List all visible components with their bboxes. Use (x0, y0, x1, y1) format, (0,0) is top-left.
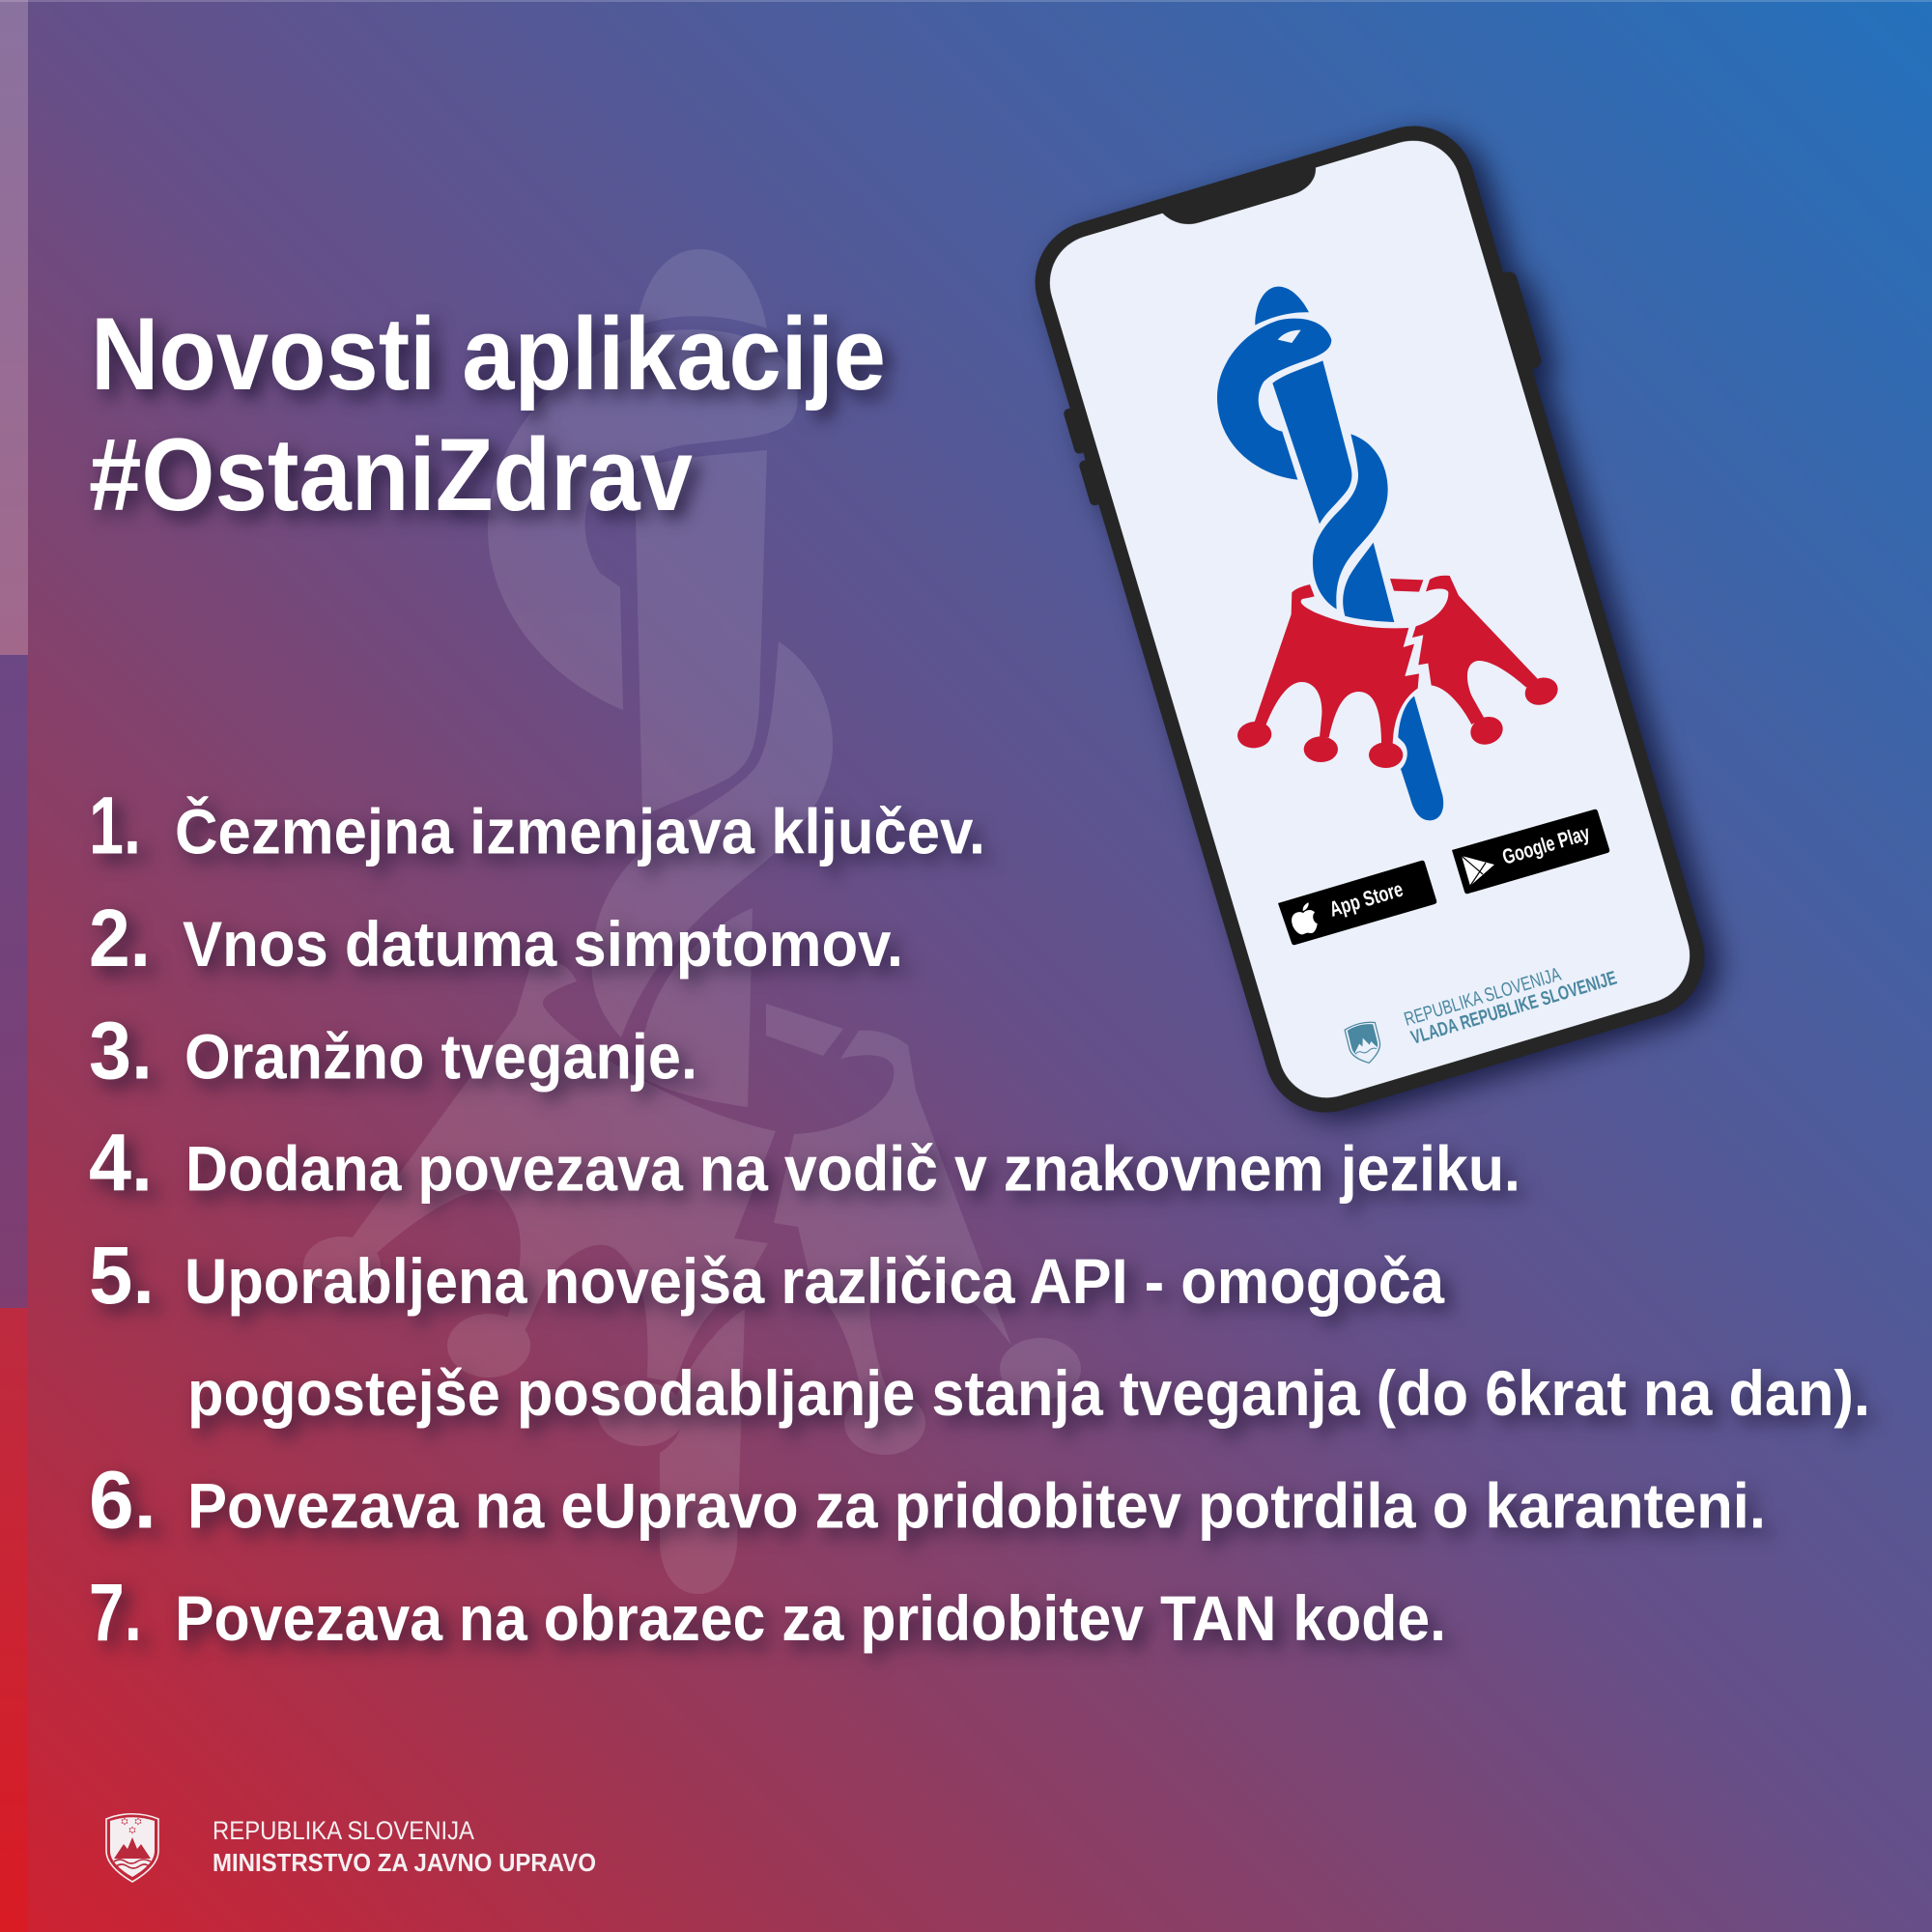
item 6: Povezava na eUpravo za pridobitev potrdila o karanteni. (187, 1470, 1766, 1542)
item 2 (89, 893, 903, 983)
App Store badge: App Store (1326, 877, 1406, 922)
item 7 (89, 1567, 1446, 1658)
ministry name: REPUBLIKA SLOVENIJA (213, 1816, 474, 1845)
item 1: 1. (89, 781, 141, 871)
government crest on phone (1344, 1020, 1384, 1066)
phone mockup (1012, 107, 1731, 1129)
item 4 (89, 1118, 1520, 1208)
icon: apple (1290, 901, 1319, 936)
title: #OstaniZdrav (89, 416, 693, 532)
item 4: Dodana povezava na vodič v znakovnem jeziku. (185, 1133, 1520, 1205)
item 5 (89, 1230, 1870, 1429)
title (89, 296, 886, 532)
item 7: 7. (89, 1567, 142, 1658)
item 6: 6. (89, 1455, 156, 1546)
Google Play badge (1452, 810, 1609, 894)
ministry name (213, 1816, 596, 1877)
ministry name: MINISTRSTVO ZA JAVNO UPRAVO (213, 1848, 596, 1877)
footer: ministry logo (106, 1814, 596, 1882)
item 5: 5. (89, 1230, 155, 1321)
phone body (1012, 107, 1731, 1129)
government text on phone: VLADA REPUBLIKE SLOVENIJE (1408, 968, 1619, 1049)
icon: play triangle (1462, 856, 1494, 886)
watermark: staff, snake and crown logo (303, 249, 1081, 1594)
item 7: Povezava na obrazec za pridobitev TAN kode. (175, 1582, 1446, 1654)
item 1: Čezmejna izmenjava ključev. (175, 796, 985, 867)
item 2: Vnos datuma simptomov. (183, 908, 903, 980)
government text on phone (1402, 964, 1619, 1049)
item 2: 2. (89, 893, 151, 983)
Google Play badge: Google Play (1499, 820, 1593, 869)
icon: Slovenian coat of arms (106, 1814, 158, 1882)
app logo: staff and snake (1217, 287, 1394, 622)
government text on phone: REPUBLIKA SLOVENIJA (1402, 964, 1564, 1031)
App Store badge (1278, 861, 1436, 945)
numbered list (89, 781, 1870, 1658)
item 1 (89, 781, 985, 871)
item 5: Uporabljena novejša različica API - omogoča (185, 1245, 1445, 1317)
item 4: 4. (89, 1118, 153, 1208)
item 3: 3. (89, 1005, 153, 1095)
title: Novosti aplikacije (91, 296, 886, 412)
item 3: Oranžno tveganje. (185, 1020, 697, 1092)
app logo: broken crown (1236, 576, 1562, 820)
item 3 (89, 1005, 697, 1095)
